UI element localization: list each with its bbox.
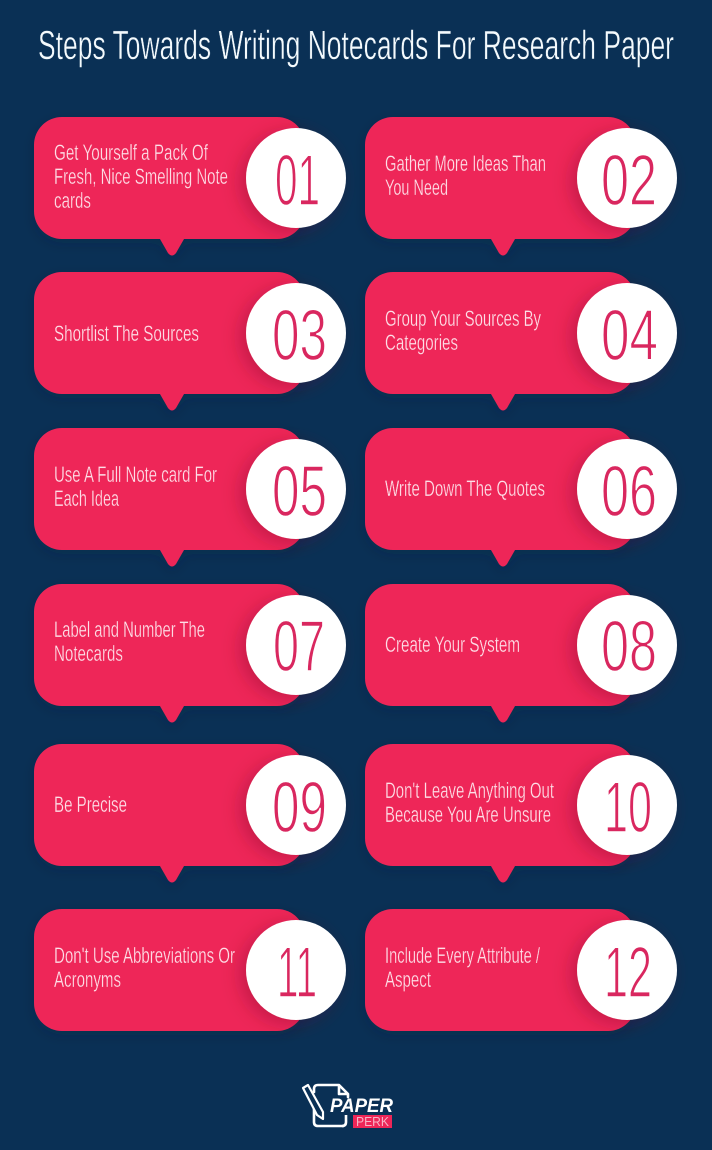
step 12 card: 12 bbox=[604, 933, 652, 1013]
step 01 card: Get Yourself a Pack Of bbox=[54, 140, 209, 165]
step 09 card: 09 bbox=[272, 768, 327, 848]
step 05 card: Each Idea bbox=[54, 486, 119, 511]
step 05 card: 05 bbox=[272, 452, 327, 532]
step 03 card: Shortlist The Sources bbox=[54, 321, 199, 346]
step 06 card: Write Down The Quotes bbox=[385, 476, 545, 501]
step 10 card: Don't Leave Anything Out bbox=[385, 778, 554, 803]
step 08 card: Create Your System bbox=[385, 632, 520, 657]
step 05 card: Use A Full Note card For bbox=[54, 462, 217, 487]
step 06 card bbox=[365, 428, 677, 566]
step 10 card: Because You Are Unsure bbox=[385, 802, 551, 827]
step 01 card: 01 bbox=[275, 141, 320, 221]
step 08 card: 08 bbox=[601, 607, 657, 687]
step 03 card bbox=[34, 272, 346, 410]
step 02 card: You Need bbox=[385, 175, 448, 200]
step 11 card bbox=[34, 909, 346, 1031]
step 09 card bbox=[34, 744, 346, 882]
step 09 card: Be Precise bbox=[54, 792, 127, 817]
step 04 card: Categories bbox=[385, 330, 458, 355]
step 07 card: Notecards bbox=[54, 641, 123, 666]
step 05 card bbox=[34, 428, 346, 566]
step 11 card: Don't Use Abbreviations Or bbox=[54, 943, 235, 968]
step 12 card: Include Every Attribute / bbox=[385, 943, 541, 968]
step 10 card: 10 bbox=[604, 768, 652, 848]
step 03 card: 03 bbox=[272, 296, 327, 376]
step 07 card: Label and Number The bbox=[54, 617, 205, 642]
logo: Paper Perk: PAPER bbox=[330, 1096, 393, 1117]
step 01 card bbox=[34, 117, 346, 256]
step 08 card bbox=[365, 584, 677, 722]
step 02 card bbox=[365, 117, 677, 256]
step 04 card bbox=[365, 272, 677, 410]
step 07 card bbox=[34, 584, 346, 722]
step 12 card: Aspect bbox=[385, 967, 431, 992]
step 02 card: Gather More Ideas Than bbox=[385, 151, 546, 176]
step 07 card: 07 bbox=[273, 607, 325, 687]
step 06 card: 06 bbox=[601, 452, 657, 532]
step 12 card bbox=[365, 909, 677, 1031]
step 10 card bbox=[365, 744, 677, 882]
step 01 card: cards bbox=[54, 188, 91, 213]
step 01 card: Fresh, Nice Smelling Note bbox=[54, 164, 228, 189]
logo: Paper Perk bbox=[303, 1085, 393, 1129]
logo: Paper Perk: PERK bbox=[356, 1114, 389, 1129]
step 04 card: 04 bbox=[601, 296, 658, 376]
step 11 card: Acronyms bbox=[54, 967, 121, 992]
step 11 card: 11 bbox=[277, 933, 317, 1013]
step 02 card: 02 bbox=[601, 141, 657, 221]
step 04 card: Group Your Sources By bbox=[385, 306, 541, 331]
